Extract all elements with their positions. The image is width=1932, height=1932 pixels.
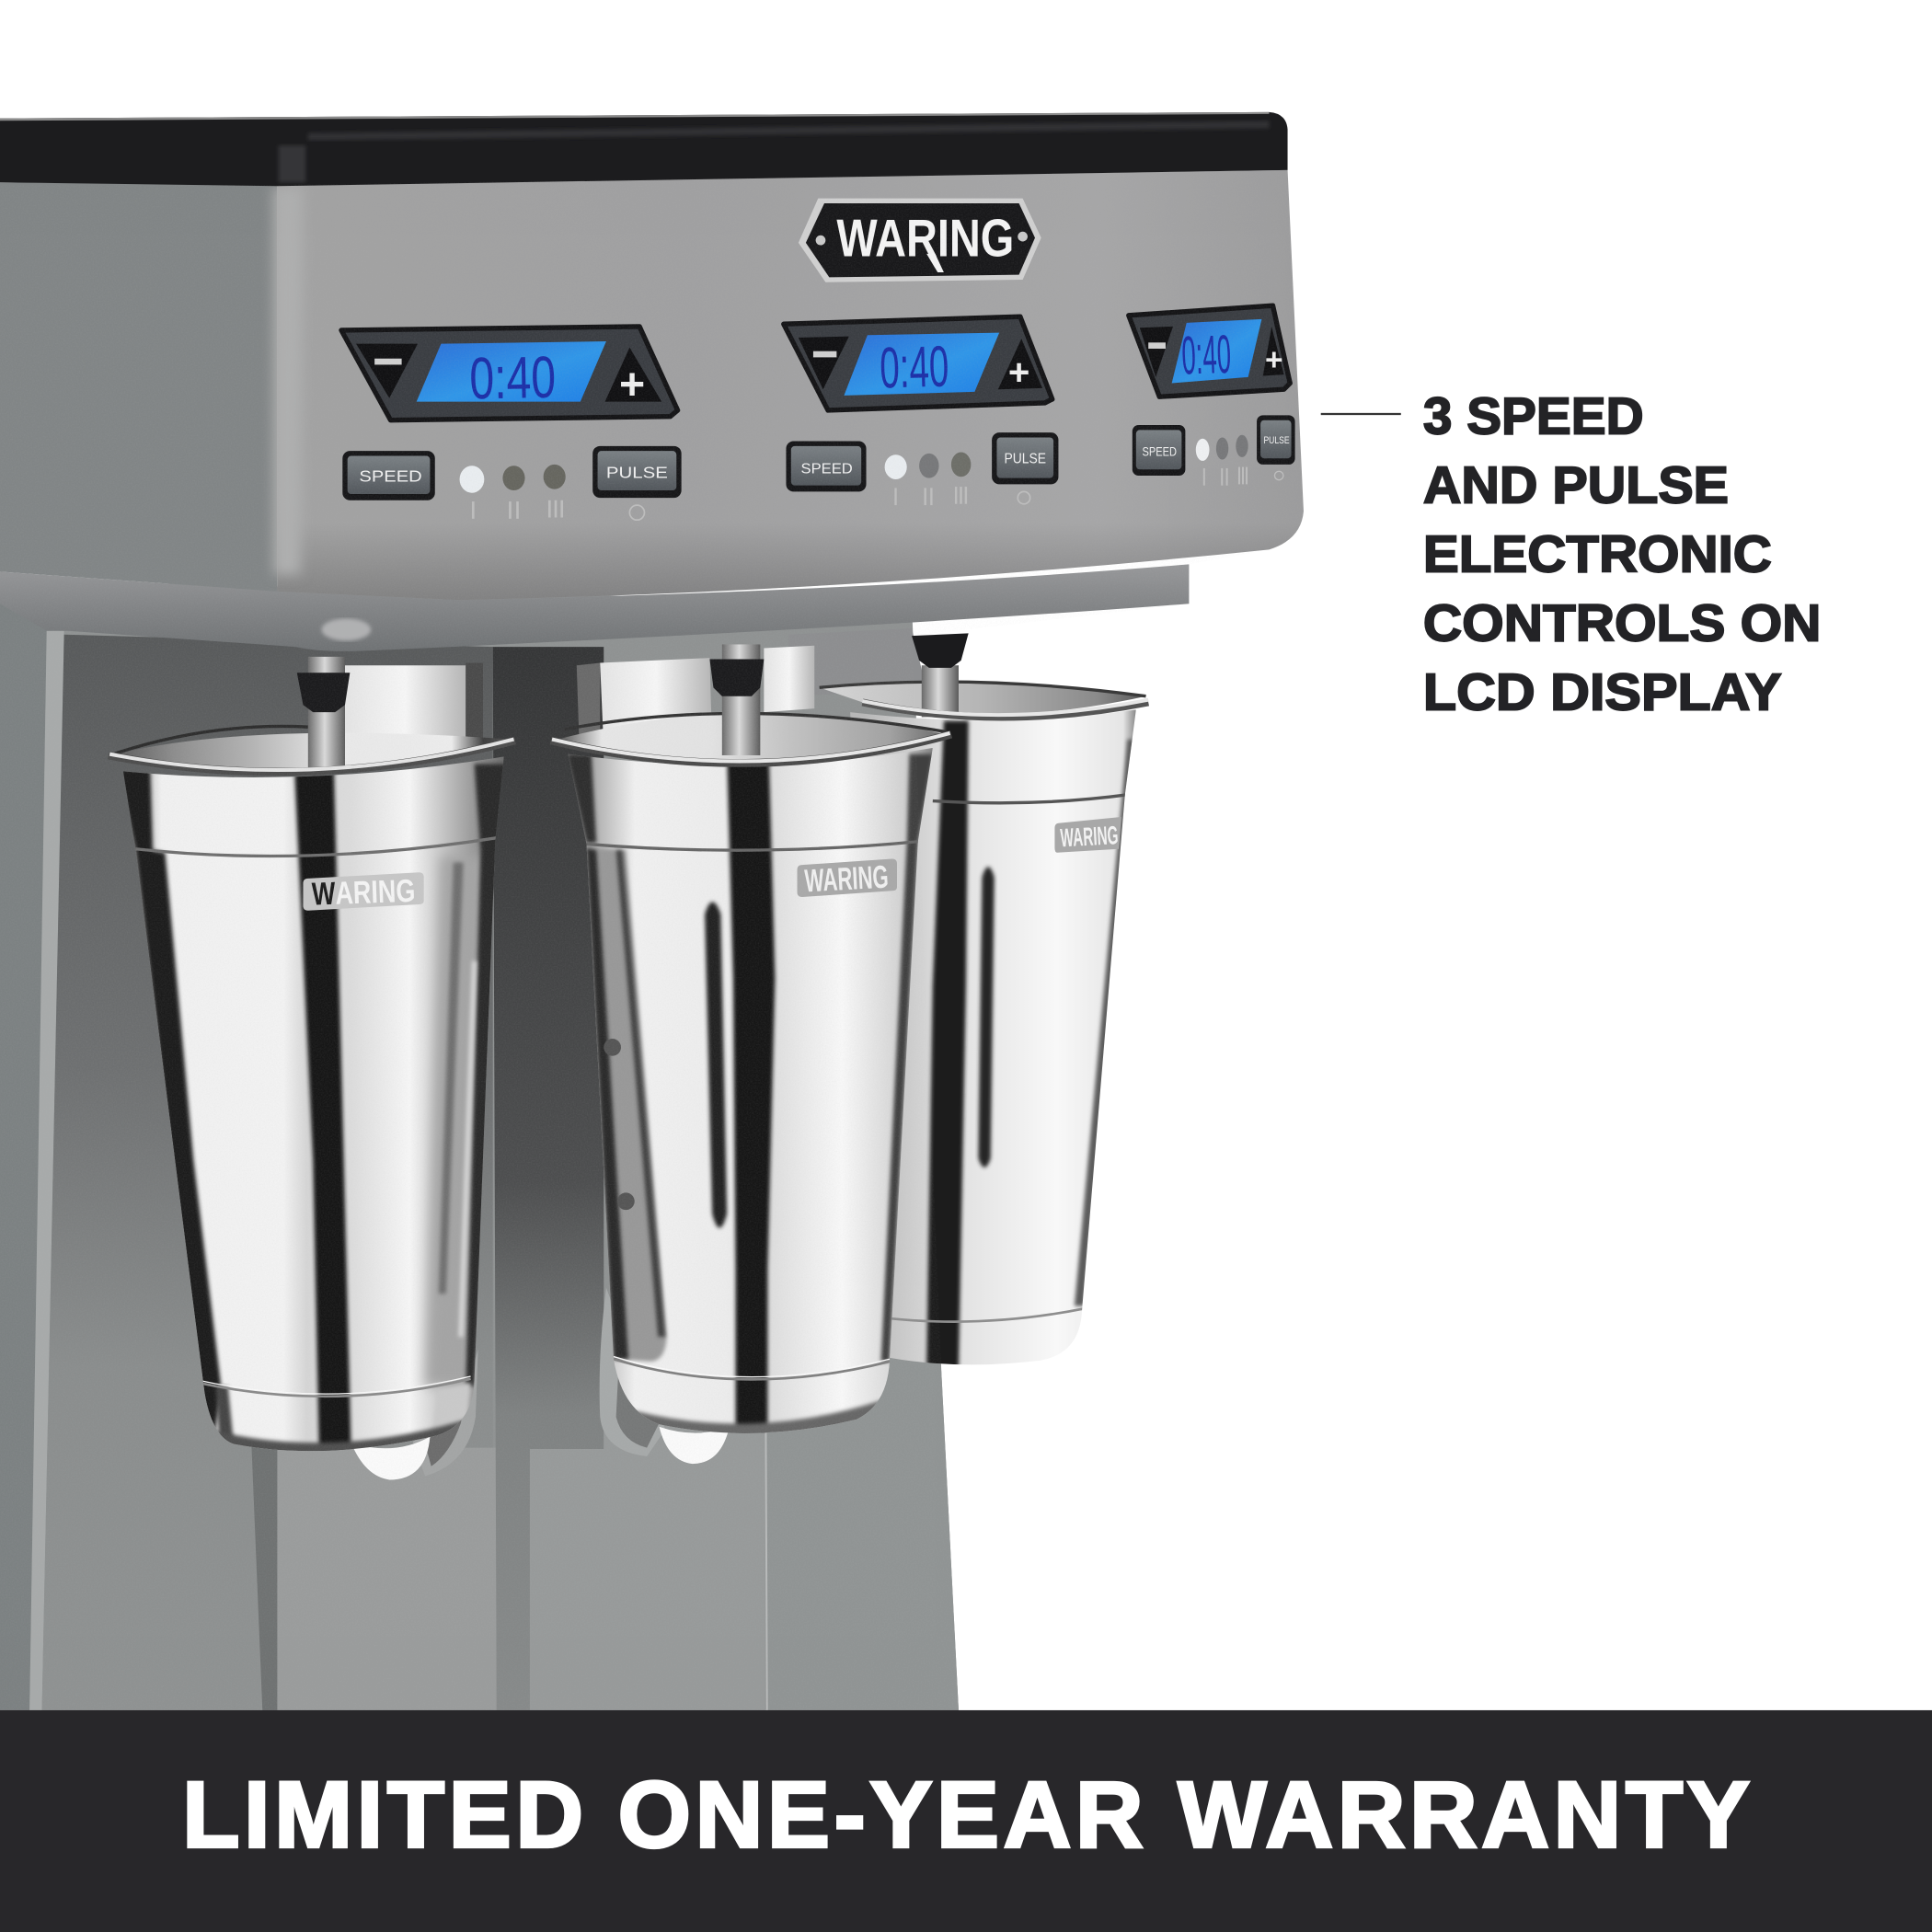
cup 1 body (111, 740, 512, 1466)
callout text (1423, 386, 1821, 720)
lid corner sheen (279, 145, 305, 182)
callout text: CONTROLS ON (1423, 593, 1821, 651)
spindle 2 (709, 644, 764, 755)
cup 2 body (560, 740, 943, 1454)
control panel 2: PULSE (1005, 451, 1046, 467)
callout text: AND PULSE (1423, 455, 1729, 513)
cup 2 logo (798, 858, 897, 899)
blender column base (0, 579, 959, 1710)
metal grain texture (0, 173, 1306, 1710)
upper rear panel (788, 628, 926, 696)
lid top edge (0, 112, 1269, 121)
mixer head (0, 112, 1304, 651)
callout connector line (1321, 413, 1401, 415)
cup 2 neck line (587, 842, 918, 850)
cup 2 upper left edge (567, 754, 596, 843)
spindle 1 (297, 657, 350, 767)
chrome brackets (345, 646, 814, 748)
cup 1 rim (109, 741, 515, 772)
PULSE button (992, 432, 1058, 484)
cup 1 neck line (135, 838, 497, 856)
SPEED button (342, 451, 435, 500)
cup 2 left reflection strip (587, 847, 667, 1362)
display housing (1129, 305, 1290, 397)
cup 1 dark reflection band (294, 769, 351, 1454)
milkshake cup 1 (109, 657, 515, 1466)
plus key (998, 339, 1042, 389)
minus key (356, 344, 418, 398)
column edge highlight (29, 622, 64, 1710)
lip highlight (322, 618, 371, 640)
cup 2 bottom rounded shade (635, 1398, 887, 1454)
cup 3 logo: WARING (1060, 821, 1119, 852)
control panel 1: PULSE (606, 464, 668, 482)
cup 3 logo (1054, 817, 1121, 853)
corner highlight (273, 188, 303, 574)
cup 2 logo: WARING (804, 859, 890, 899)
cup 2 slot reflection (705, 902, 727, 1228)
cup 1 left dark edge (119, 769, 222, 1448)
control panel 1: 0:40 (469, 344, 557, 411)
control panel 3 (1129, 305, 1295, 486)
PULSE button (592, 446, 682, 498)
logo plate: WARING: WARING (836, 210, 1014, 269)
holder arm and white tip, centre (600, 1288, 730, 1464)
control panel 1: SPEED (359, 467, 422, 486)
lower groove (251, 1442, 277, 1710)
cup 1 logo: WARING (311, 873, 416, 913)
cup 2 base line (614, 1359, 890, 1379)
callout text: 3 SPEED (1423, 386, 1644, 444)
callout text: ELECTRONIC (1423, 524, 1772, 582)
dark centre gap (493, 647, 604, 1710)
warranty banner: LIMITED ONE-YEAR WARRANTY (182, 1763, 1750, 1868)
centre panel beside holder (604, 1355, 765, 1449)
minus key (1140, 327, 1173, 377)
control panel 1: + (619, 360, 645, 409)
spindle 3 (912, 633, 969, 717)
cup 3 interior (820, 682, 1146, 715)
minus key (799, 337, 849, 389)
cup 1 right gray zone (425, 857, 495, 1386)
logo plate: WARING (799, 199, 1041, 282)
cup 3 body (838, 702, 1146, 1374)
control panel 1 (341, 327, 682, 520)
SPEED button (786, 441, 867, 491)
control panel 2 (784, 316, 1058, 505)
control panel 2: + (1008, 351, 1029, 393)
cup 2 interior (553, 713, 950, 764)
plus key (1263, 327, 1284, 375)
speed LEDs (1196, 439, 1210, 461)
cup 3 rim (863, 702, 1148, 717)
cup 2 dark reflection band (727, 754, 775, 1442)
callout text: LCD DISPLAY (1423, 662, 1782, 720)
cup 2 rim (551, 734, 951, 763)
cup 1 interior (111, 733, 512, 769)
milkshake cup 3 (820, 633, 1148, 1374)
LCD screen (417, 341, 606, 402)
control panel 2: SPEED (801, 460, 853, 477)
warranty banner (0, 1710, 1932, 1932)
display housing (784, 316, 1052, 410)
recessed panel left (42, 635, 493, 1710)
holder arm and white tip, left (351, 1350, 478, 1479)
milkshake cup 2 (551, 644, 951, 1454)
black lid (0, 112, 1288, 186)
column left edge (0, 579, 47, 1710)
head front face (277, 170, 1304, 600)
display housing (341, 327, 678, 420)
plus key (605, 348, 661, 402)
head front shading (277, 170, 1304, 600)
speed LEDs (460, 466, 484, 493)
head side face (0, 182, 277, 592)
LCD screen (1172, 319, 1261, 384)
LCD screen (844, 333, 999, 396)
control panel 3: SPEED (1143, 445, 1177, 459)
control panel 3: PULSE (1263, 435, 1290, 446)
control panel 3: 0:40 (1180, 325, 1232, 386)
right panel (765, 1330, 959, 1710)
PULSE button (1257, 415, 1295, 465)
control panel 3: + (1265, 343, 1283, 377)
cup 1 lower left reflection (215, 1386, 234, 1448)
cup 1 base line (197, 1379, 471, 1397)
head underside lip (0, 564, 1189, 651)
control panel 2: 0:40 (879, 335, 949, 401)
lower lit panel (277, 1448, 497, 1710)
cup 1 bottom rounded shade (217, 1417, 463, 1452)
cup 2 right edge (881, 754, 933, 1362)
SPEED button (1133, 425, 1185, 476)
cup 1 right reflections (466, 764, 508, 1386)
speed LEDs (885, 454, 907, 479)
lower centre panel (530, 1448, 765, 1710)
lid front sheen (308, 121, 1269, 141)
